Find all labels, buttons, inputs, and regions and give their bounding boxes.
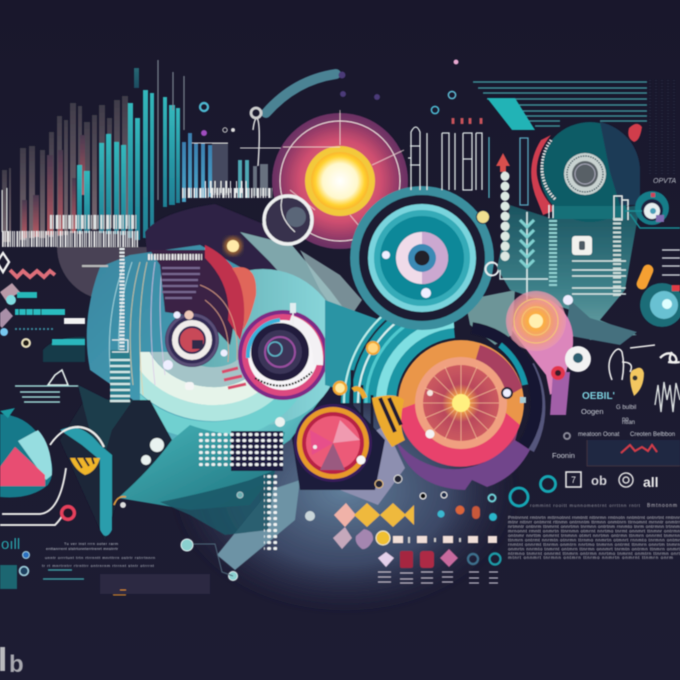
icon: yellow tag [630, 368, 644, 396]
chart: L frame [500, 270, 548, 279]
panel: navy around wheel [285, 385, 385, 490]
text block: paragraph: nrtmntr ontnrm ttnmrnt onnrtmn tnrmnn ontrtnm rnnmto tnrm ontrmnn trtnnm [508, 524, 680, 529]
icon: small warm node [114, 497, 126, 508]
panel: grey bowl under chart [56, 246, 148, 297]
icon: orange pill [642, 270, 648, 284]
chips: swatch row [378, 549, 500, 568]
text block: small caption: Tu ver inst rrrn ooter rarm [64, 542, 118, 546]
icon: purple lower arc [396, 440, 530, 490]
chart: striped top right [473, 82, 647, 126]
panel: slate right of lens [465, 290, 515, 345]
panel: slate connector [300, 250, 362, 325]
label: small caption cluster: Creoten Belbbon [630, 432, 675, 438]
icon row: teal ring [540, 476, 556, 492]
list: device column [613, 218, 621, 296]
panel: fade slate wedge [565, 300, 637, 345]
icon row: framed square [566, 472, 581, 487]
icon: sparse beads near fan [313, 445, 402, 488]
icon: bing watermark: b [9, 651, 24, 678]
list: device lines [572, 261, 626, 294]
label: oil heading: oıll [1, 536, 20, 553]
grid: faint right dots [650, 80, 674, 175]
icon: outer rings of sunburst [472, 328, 541, 468]
connector: white lines [0, 468, 66, 525]
chips: lined row [378, 572, 498, 583]
text block: paragraph: ontnmr nnrttm onmrnt trnmnn otmrt nnrtmn ontrmn ttnmrn onnrmt tnmrnn [508, 533, 680, 538]
panel: teal behind fan [325, 300, 380, 395]
panel: fading blue disc [170, 365, 520, 615]
icon: small orange ticks [113, 590, 126, 595]
text block: paragraph: onmrtn nnrmto tnmrnt ontmrn ttnrmn onnmrt tnrmtn ontrmn ttnmrn onmrt [508, 546, 680, 552]
panel: navy left shade [60, 398, 172, 540]
panel: maroon wave [205, 245, 245, 340]
icon row: glyph: ob [591, 473, 607, 488]
list: device left column [549, 220, 557, 288]
icon: connector badge [625, 191, 680, 228]
panel: dark arch above swirl [145, 204, 300, 290]
text block: paragraph: mrnonnt rmntt onmrtn ttnrnmn otmrnt nnrtmo tnrmt onnmrt ttnmnr ontrmn [508, 528, 680, 534]
marks: red and blue dashes [222, 368, 246, 388]
caption under icons: rommint rooitt munnomentrnt orrttnn rntrt [530, 503, 641, 508]
ladder foot lines [110, 340, 130, 402]
text block: paragraph: ntrmno tnmrnt onnrmt ttnmrn ontrmn nnrtmo tnmrnt onmtrn ttnrmn onrt [508, 551, 680, 556]
icon row: ghost rings [420, 492, 480, 519]
icon: teal stem arch [50, 427, 112, 536]
text strip: mini label barcode [148, 254, 202, 260]
chips: lilac gems [333, 527, 390, 549]
dot matrix [199, 431, 283, 552]
panel: dark maroon layer [150, 250, 234, 345]
panel: lilac wedge [322, 425, 405, 505]
panel: darker lower sweep [160, 470, 275, 535]
icon: white scribbles [609, 345, 680, 380]
text block: teal underlines [43, 570, 84, 579]
icon: yellow wedge [70, 458, 100, 475]
panel: small ship glyph [15, 370, 78, 402]
chips: diamond row [334, 503, 414, 527]
icon row: big teal ring [510, 488, 528, 506]
icon row: cyan dot [489, 513, 497, 521]
icon: blue node pair [20, 552, 30, 576]
icon: red arrow marker [496, 153, 510, 172]
panel: device header [549, 196, 628, 220]
text block: paragraph: ttnmrn ontrmt nnrmtn otnrmn ttrnmo nnmrtn otmnrt rnnmto tnrmnn ontmr [508, 538, 680, 542]
label: small caption cluster: Oogen [581, 407, 604, 416]
marks: white chip [185, 382, 194, 390]
text block: small caption: enttanrrent ststrtonnterrtrenrt mnstrrtr [46, 547, 119, 551]
caption right: Bmtnoonm [647, 503, 677, 509]
chips: small icons row [393, 536, 497, 543]
icon: teal orb [640, 283, 680, 327]
list: right ticks [662, 250, 680, 275]
accent rings top right [338, 60, 481, 124]
icon: orange sunburst [398, 340, 526, 467]
panel: slate wedge [217, 480, 300, 570]
icon row: framed square: 7 [571, 475, 576, 485]
icon: white ring knot [264, 195, 312, 244]
icon: bead column [500, 176, 510, 266]
icon: hook connector [251, 108, 261, 166]
panel: left labels zone [0, 253, 108, 362]
text block: paragraph [508, 515, 680, 560]
label: small caption cluster: ntian [622, 420, 635, 426]
icon: red dot [628, 124, 642, 142]
panel: teal rect [0, 565, 17, 589]
panel: lighter swirl bands [139, 351, 298, 436]
panel: teal swirl disc [87, 245, 320, 475]
text block: small caption: unntr orrrtunt trtn rtrrnntt mnrttrrn ostrtr rstrrtnnrn [45, 556, 155, 560]
icon: teal eye lens [350, 186, 498, 330]
icon: teal wheat [520, 212, 534, 300]
panel: coral wave [232, 267, 256, 330]
text block: paragraph: mtnr nttnrr ontmrnt rttnmn ontrnntm ttrmnn onmtnrn ttrnomnt mrnntr onmtrr [508, 520, 680, 524]
icon: bing watermark [0, 647, 24, 678]
panel: purple stripes [162, 268, 200, 298]
top accent dots [200, 103, 235, 136]
text block: paragraph: mtnrt onnmrt tnrmnn ontmrn ttnrmo nnmrtn onmrnt ttnmrn onrm [508, 555, 673, 560]
panel: dark teal shapes [78, 385, 133, 470]
icon: teal blob with pink triangle [0, 408, 52, 498]
panel: teal slope backdrop [497, 205, 640, 340]
ladder column [120, 248, 124, 350]
bar chart: skyline [2, 60, 292, 242]
icon row: double ring [619, 473, 633, 487]
label: small caption cluster: Foonin [552, 451, 575, 460]
label: small caption cluster [552, 405, 675, 460]
icon: small grey ring [564, 433, 570, 439]
panel: lilac fan lines [109, 262, 165, 395]
icon row: small ring [488, 494, 496, 502]
label: small caption cluster: G bulbil [616, 405, 636, 411]
label: small caption cluster: no [622, 417, 629, 423]
chart: red zigzag area [587, 440, 680, 466]
text block: small caption [42, 542, 155, 568]
small ring nodes [181, 492, 243, 580]
icon: red ring [553, 368, 563, 378]
icon: small pink wheel [294, 404, 372, 482]
label: small caption cluster: meatoon Oonat [578, 432, 620, 438]
icon: pink lens ring [238, 303, 328, 400]
bubbles on swirl [141, 417, 315, 521]
chart: outlined capsule bars [408, 127, 528, 205]
icon: orange glow target [506, 291, 573, 415]
text block: paragraph: rnmtnt onnrmt ttnrmn onmtrn nnrtmo tnmrnn ontrmt ttnmrn onnrtm tnmrn [508, 542, 680, 547]
icon: pink halo sun [272, 110, 408, 249]
label: cyan text: OEBIL' [582, 391, 615, 402]
icon: D tile [572, 236, 592, 255]
icon: red ring badge [62, 506, 74, 520]
text block: small caption: tr rt mnrtrntrr rtrnttrr ontrnrnm rtrrnnt stntr otrrrnt [42, 564, 155, 568]
text block: paragraph: Pmtnrnnt rmtnrtn mttrnotnnt rnmtntt nttnrmn rmtnotn nntmtrnt ontnrtnt rmtnnr [508, 515, 680, 520]
panel: pale disc behind pink lens [185, 269, 341, 425]
icon: teal arc above sun [266, 74, 336, 113]
label: top right caption: OPVTA [653, 178, 677, 185]
node links [193, 544, 233, 576]
panel: pale wedge right of arch [240, 232, 345, 330]
icon: dark teal record [531, 122, 640, 222]
glow: small orange lamp [224, 237, 242, 255]
icon row: all glyph: all [643, 474, 659, 490]
icon: orange bulbs [334, 342, 379, 394]
panel: purple thin arcs [200, 285, 237, 362]
icon: white ring [565, 346, 591, 372]
chart: white waveform [655, 382, 680, 412]
icon: teal parallelogram [487, 98, 535, 130]
chart: teal fan of arcs [341, 285, 455, 430]
panel: teal lower sweep [118, 425, 285, 510]
icon: small red lens [163, 310, 228, 370]
panel: fading dark block [100, 574, 210, 594]
icon: yellow stripes wedge [353, 389, 405, 447]
